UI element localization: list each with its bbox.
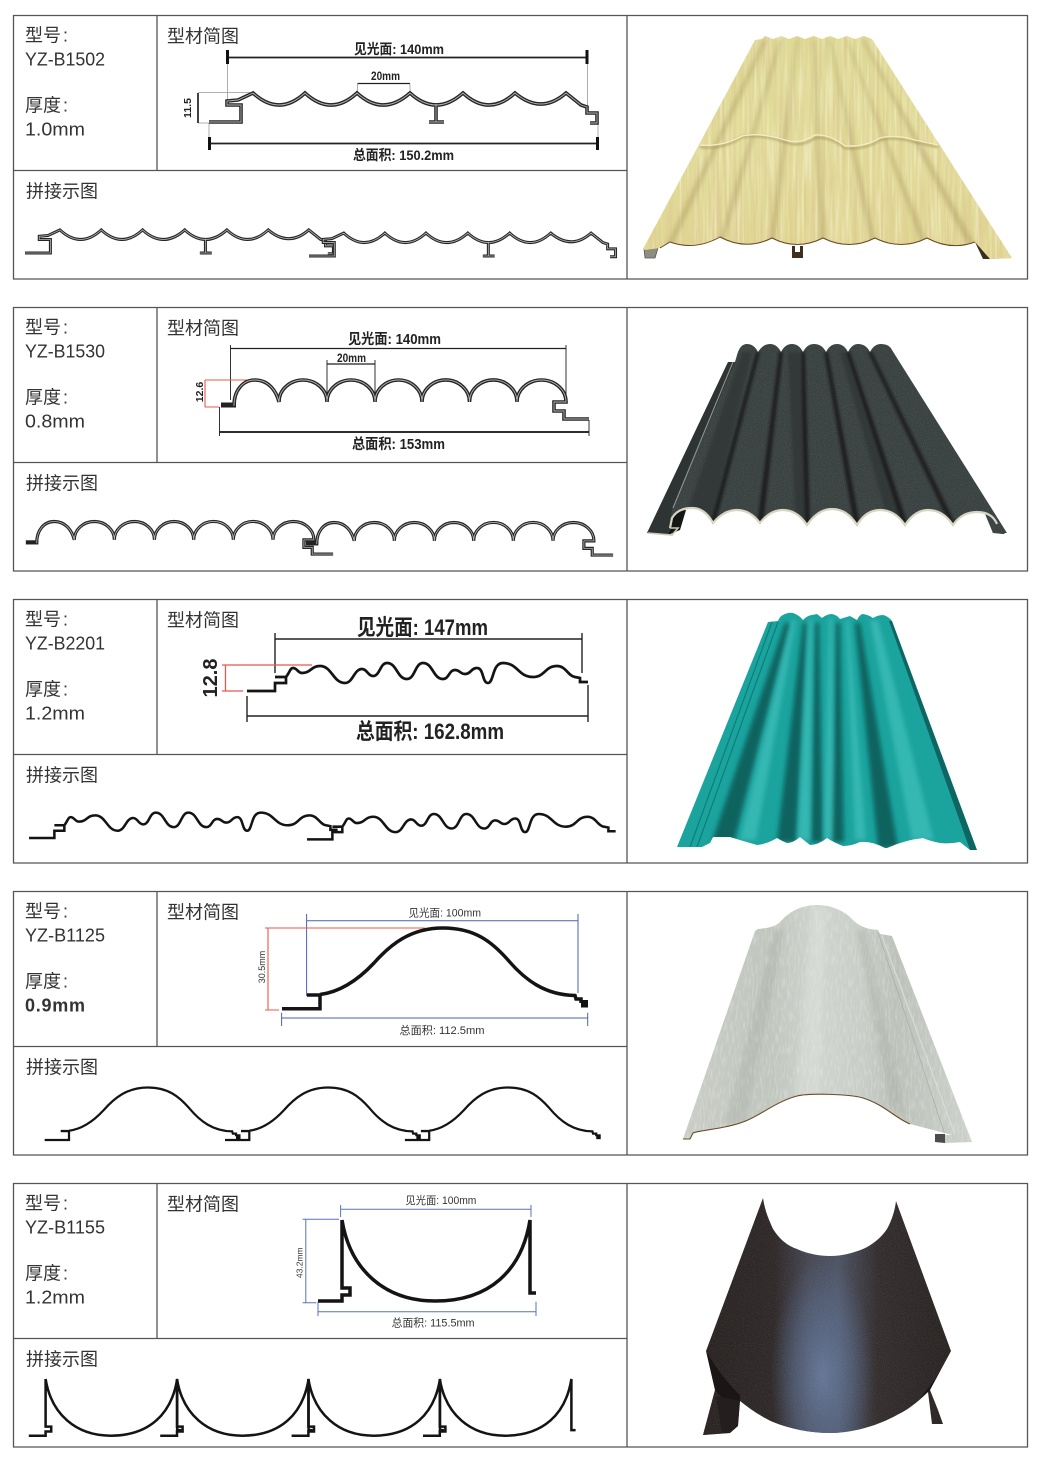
model and thickness text: YZ-B1530 bbox=[25, 342, 105, 362]
profile diagram bbox=[182, 41, 598, 163]
profile diagram: 总面积: 115.5mm bbox=[392, 1316, 475, 1330]
heading: profile diagram: 型材简图 bbox=[167, 610, 239, 630]
profile diagram bbox=[295, 1193, 536, 1330]
profile diagram: 12.6 bbox=[194, 382, 206, 402]
profile diagram bbox=[257, 906, 588, 1037]
model and thickness text bbox=[25, 1194, 105, 1308]
profile diagram bbox=[200, 615, 588, 744]
model and thickness text: YZ-B2201 bbox=[25, 634, 105, 654]
model and thickness text: YZ-B1155 bbox=[25, 1218, 105, 1238]
model and thickness text: 厚度: bbox=[25, 680, 68, 700]
splice diagram bbox=[25, 230, 616, 257]
profile diagram bbox=[194, 331, 589, 453]
model and thickness text: 0.8mm bbox=[25, 412, 85, 432]
profile diagram: 总面积: 162.8mm bbox=[356, 719, 504, 744]
panel: YZ-B1125 bbox=[14, 892, 1028, 1458]
panel: YZ-B2201 bbox=[14, 600, 1028, 1458]
table frame bbox=[14, 892, 1028, 1155]
profile diagram: 见光面: 140mm bbox=[348, 331, 441, 348]
profile diagram: 见光面: 100mm bbox=[408, 906, 481, 920]
heading: profile diagram: 型材简图 bbox=[167, 902, 239, 922]
heading: profile diagram: 型材简图 bbox=[167, 1194, 239, 1214]
profile diagram: 总面积: 112.5mm bbox=[400, 1023, 484, 1037]
product image: dark scalloped panel bbox=[640, 340, 1012, 538]
heading: profile diagram: 型材简图 bbox=[167, 318, 239, 338]
heading: splice diagram: 拼接示图 bbox=[26, 1058, 98, 1078]
splice diagram bbox=[45, 1088, 601, 1140]
profile diagram: 见光面: 140mm bbox=[354, 41, 444, 57]
splice diagram bbox=[26, 521, 613, 555]
model and thickness text: 1.2mm bbox=[25, 1288, 85, 1308]
profile diagram: 见光面: 147mm bbox=[357, 615, 488, 640]
panel: YZ-B1530 bbox=[14, 308, 1028, 571]
profile diagram: 12.8 bbox=[200, 659, 222, 697]
table frame bbox=[14, 600, 1028, 863]
product image: yellow wood-grain panel bbox=[640, 30, 1015, 262]
panel: YZ-B1155 bbox=[14, 1184, 1028, 1458]
model and thickness text bbox=[25, 902, 105, 1016]
table frame bbox=[14, 308, 1028, 571]
heading: splice diagram: 拼接示图 bbox=[26, 474, 98, 494]
splice diagram bbox=[29, 1379, 576, 1436]
profile diagram: 总面积: 153mm bbox=[352, 435, 445, 453]
model and thickness text bbox=[25, 318, 105, 432]
profile diagram: 11.5 bbox=[182, 98, 194, 118]
profile diagram: 见光面: 100mm bbox=[405, 1193, 476, 1207]
profile diagram: 20mm bbox=[371, 71, 400, 83]
model and thickness text: 厚度: bbox=[25, 1264, 68, 1284]
model and thickness text: 厚度: bbox=[25, 388, 68, 408]
splice diagram bbox=[29, 813, 616, 839]
product image: grey linen arched panel bbox=[680, 900, 975, 1148]
heading: splice diagram: 拼接示图 bbox=[26, 182, 98, 202]
heading: splice diagram: 拼接示图 bbox=[26, 1350, 98, 1370]
panel: YZ-B1502 bbox=[14, 16, 1028, 279]
table frame bbox=[14, 16, 1028, 279]
model and thickness text: 型号: bbox=[25, 610, 68, 630]
model and thickness text: 1.0mm bbox=[25, 120, 85, 140]
model and thickness text: YZ-B1125 bbox=[25, 926, 105, 946]
model and thickness text: 厚度: bbox=[25, 96, 68, 116]
model and thickness text: 型号: bbox=[25, 902, 68, 922]
table frame bbox=[14, 1184, 1028, 1447]
profile diagram: 43.2mm bbox=[295, 1247, 305, 1278]
profile diagram: 20mm bbox=[337, 353, 366, 365]
product image: black concave panel bbox=[703, 1198, 951, 1435]
model and thickness text: 1.2mm bbox=[25, 704, 85, 724]
model and thickness text: 型号: bbox=[25, 26, 68, 46]
model and thickness text bbox=[25, 610, 105, 724]
model and thickness text bbox=[25, 26, 105, 140]
profile diagram: 总面积: 150.2mm bbox=[353, 147, 454, 163]
profile diagram: 30.5mm bbox=[257, 951, 267, 983]
heading: splice diagram: 拼接示图 bbox=[26, 766, 98, 786]
heading: profile diagram: 型材简图 bbox=[167, 26, 239, 46]
model and thickness text: 厚度: bbox=[25, 972, 68, 992]
product image: teal wave panel bbox=[670, 610, 982, 855]
model and thickness text: 型号: bbox=[25, 318, 68, 338]
model and thickness text: YZ-B1502 bbox=[25, 50, 105, 70]
model and thickness text: 0.9mm bbox=[25, 996, 85, 1016]
model and thickness text: 型号: bbox=[25, 1194, 68, 1214]
